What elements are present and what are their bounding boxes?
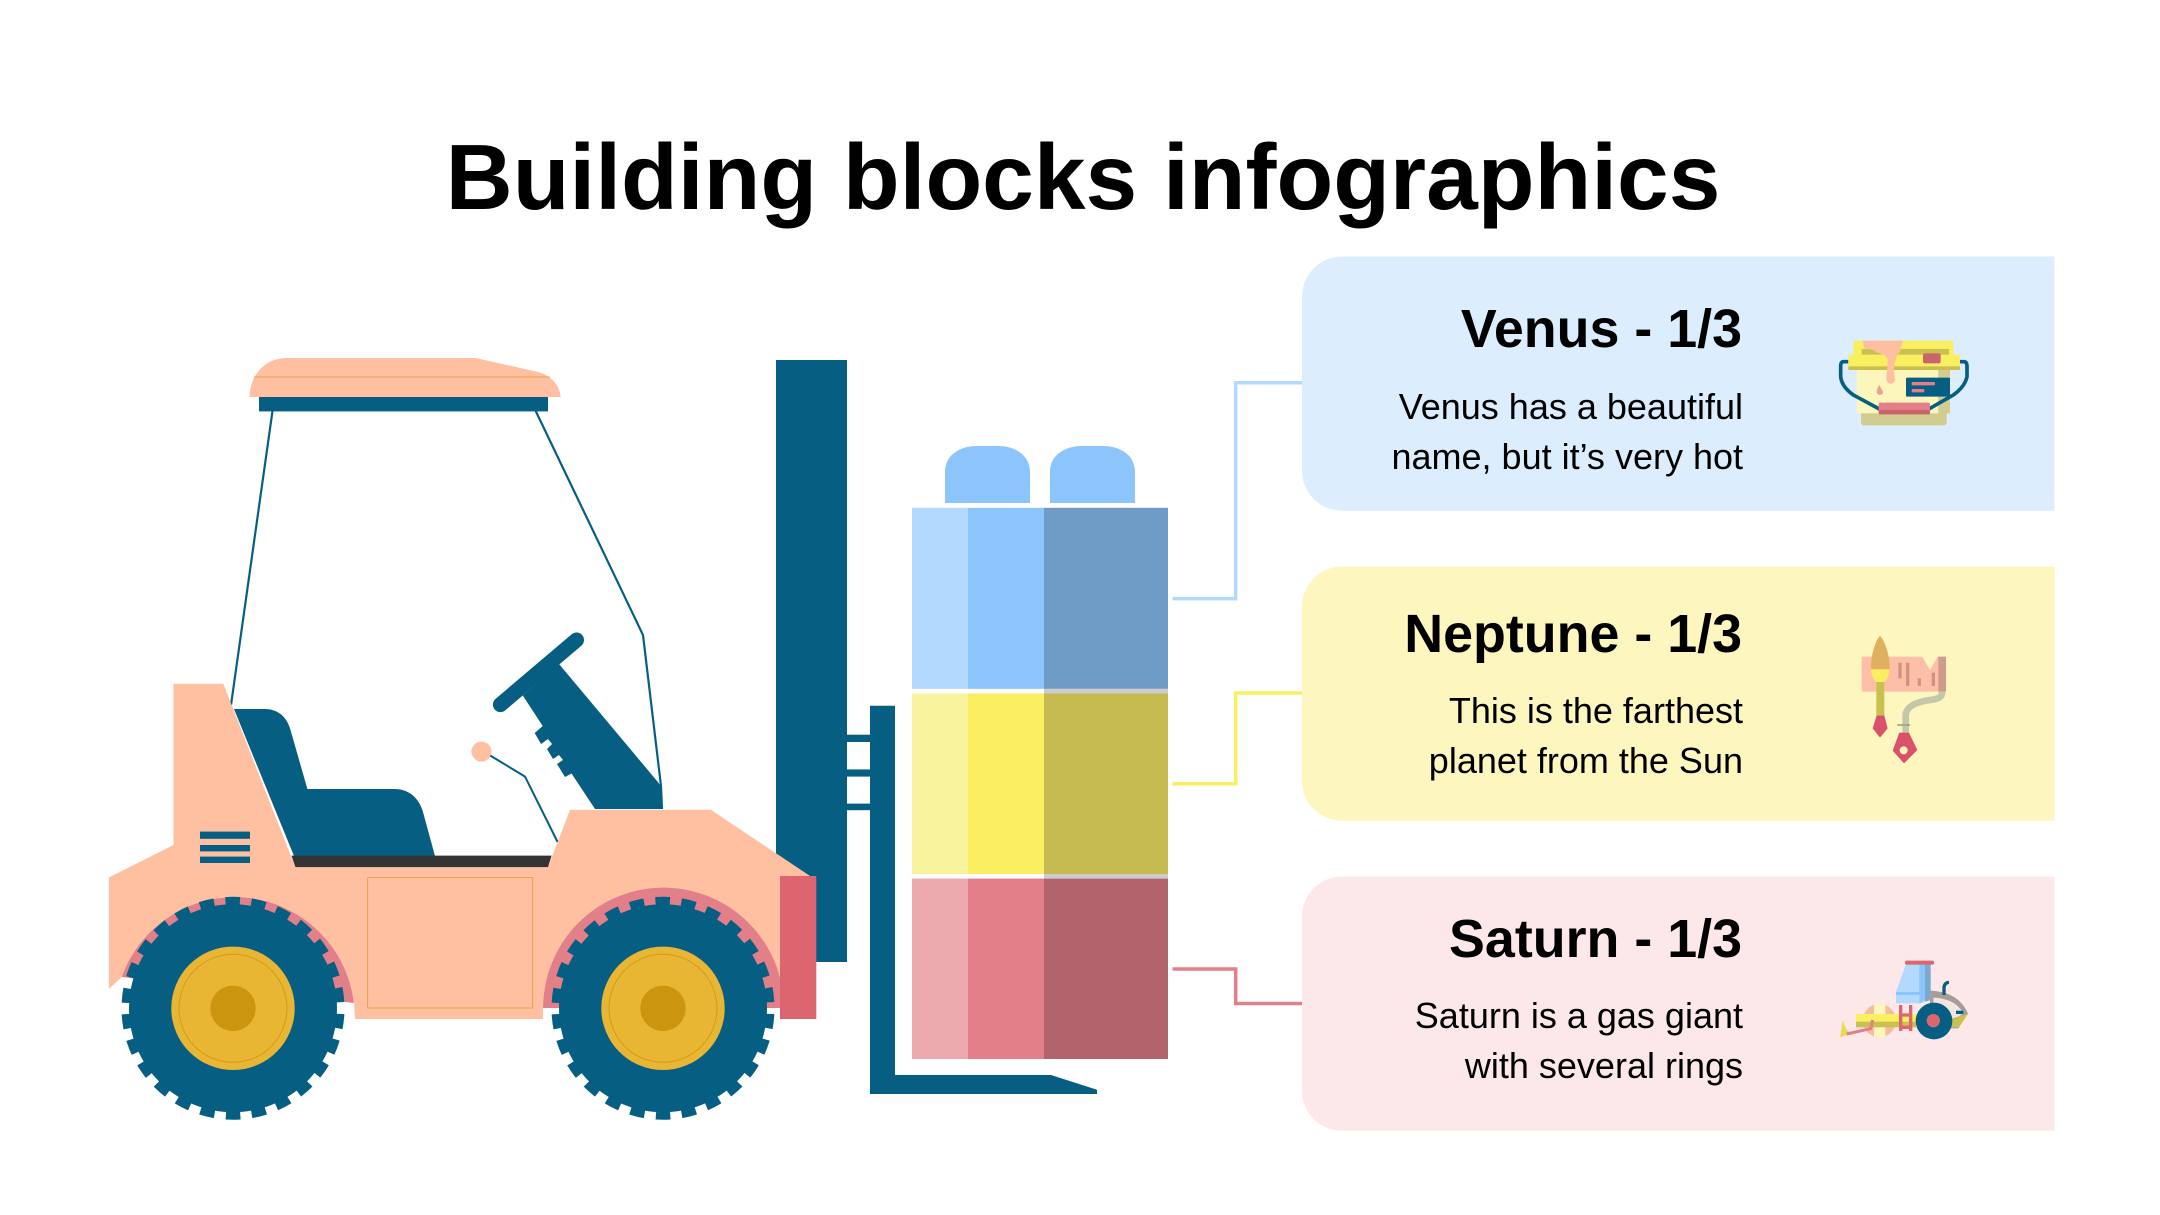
floor bar [292,856,552,867]
rear fender [122,897,354,1003]
forklift vehicle [109,358,816,1115]
steering wheel and column [500,640,662,809]
Neptune background [1302,566,2054,821]
panel: Venus [1302,256,2054,511]
forklift body [109,684,810,1019]
Venus text: Venus has a beautiful [1399,386,1743,427]
Venus text: name, but it’s very hot [1391,436,1743,477]
separators [1044,689,1168,879]
roof [250,358,561,411]
panel: Neptune [1302,566,2054,821]
control lever [472,742,558,842]
connector: red [1172,969,1302,1004]
blue block [912,508,1168,689]
front fender [543,888,784,1008]
red block [912,879,1168,1059]
title: Building blocks infographics [446,125,1720,229]
Saturn background [1302,876,2054,1131]
Venus background [1302,256,2054,511]
Neptune heading: Neptune - 1/3 [1404,604,1742,664]
Neptune text: This is the farthest [1449,690,1743,731]
panel: Saturn [1302,876,2054,1131]
Venus heading: Venus - 1/3 [1461,299,1742,359]
Saturn text: with several rings [1464,1045,1743,1086]
cab frame posts [231,411,662,809]
icon: paint bucket [1841,341,1967,425]
block studs [945,446,1135,503]
body panel outline [368,878,533,1008]
Saturn text: Saturn is a gas giant [1415,995,1743,1036]
connector: blue [1172,383,1302,599]
seat [234,709,435,856]
Neptune text: planet from the Sun [1429,740,1743,781]
rear wheel [126,901,340,1115]
fork [870,706,1097,1094]
vent [200,832,250,863]
forklift mast [776,360,871,962]
icon: road roller [1840,961,1968,1039]
connector: yellow [1172,693,1302,784]
front bumper [780,876,816,1019]
building block stack [912,446,1168,1059]
front wheel [556,901,770,1115]
yellow block [912,693,1168,874]
Saturn heading: Saturn - 1/3 [1449,909,1742,969]
icon: ruler and brushes [1862,636,1946,763]
